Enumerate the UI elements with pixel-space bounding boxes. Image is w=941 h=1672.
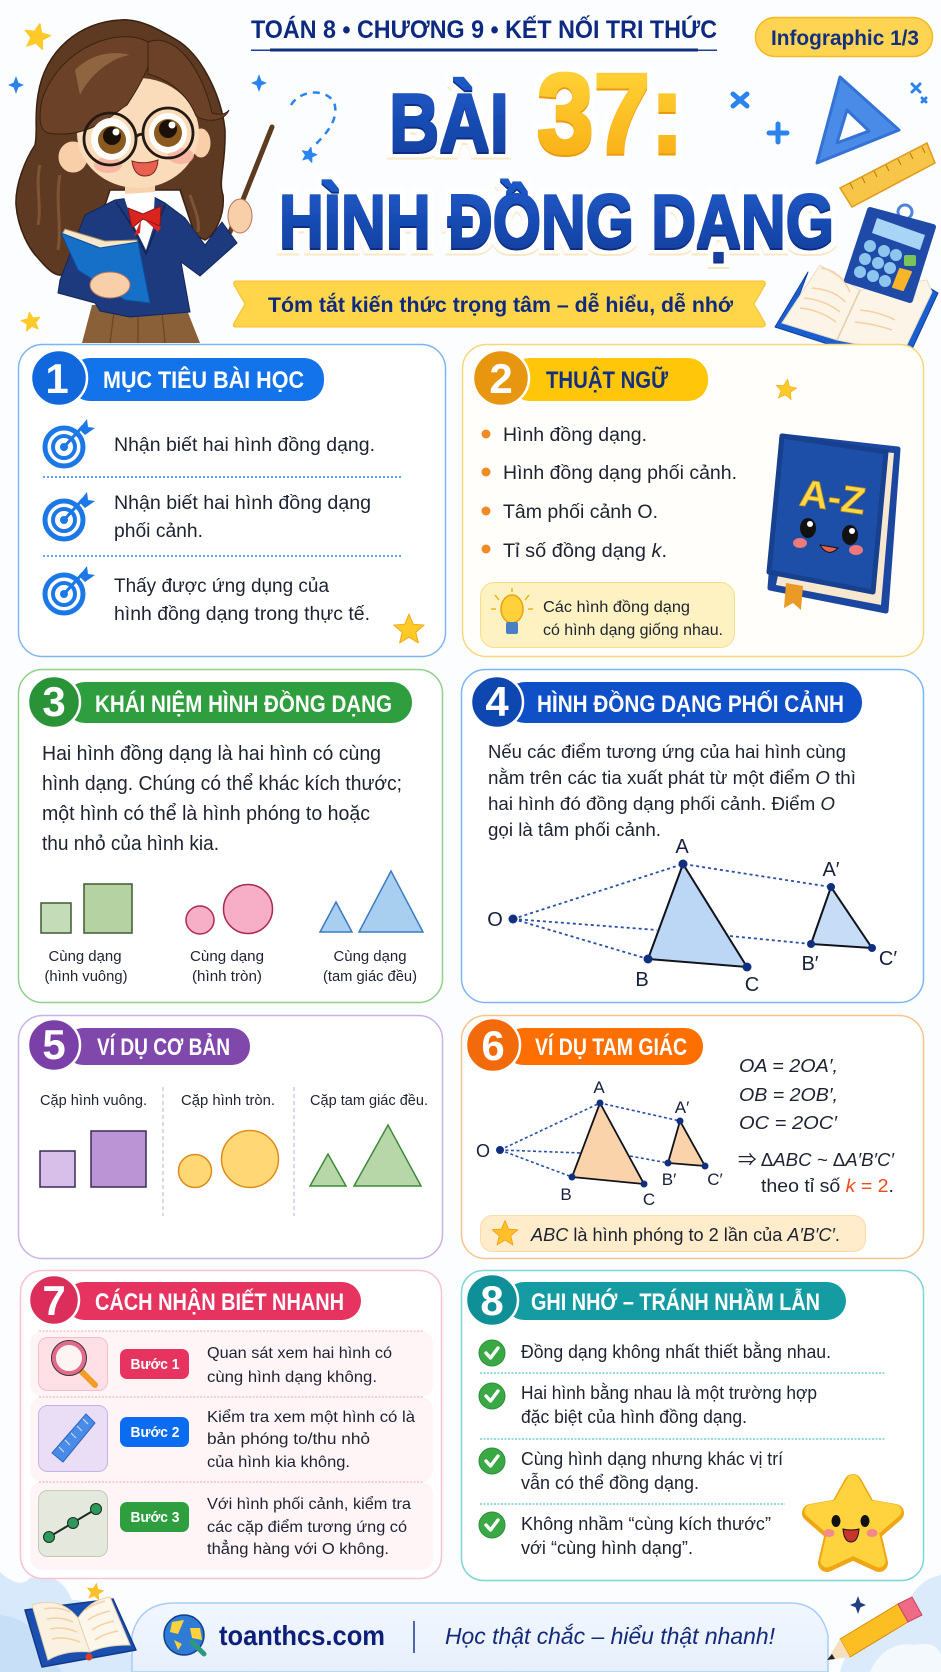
footer background clouds	[0, 1572, 941, 1672]
term list: Tâm phối cảnh O.	[503, 502, 658, 523]
example: triangles	[320, 871, 423, 985]
main title: 37:	[537, 50, 684, 176]
header pill 6	[466, 1018, 703, 1072]
step 3 row: Bước 3	[130, 1509, 180, 1526]
icon: footer open book	[25, 1582, 136, 1667]
step 1 row	[30, 1331, 433, 1397]
icon: calculator	[847, 205, 933, 300]
panel 7: quick recognition steps	[20, 1270, 442, 1578]
term list: Hình đồng dạng.	[503, 425, 647, 446]
header pill 4: HÌNH ĐỒNG DẠNG PHỐI CẢNH	[537, 689, 844, 718]
footer bar	[132, 1603, 828, 1672]
example: circle pair: Cặp hình tròn.	[181, 1092, 275, 1109]
definition text	[42, 743, 402, 855]
diagram: perspective triangles: C′	[879, 948, 897, 970]
definition text: Hai hình đồng dạng là hai hình có cùng	[42, 743, 381, 765]
step 3 row: thẳng hàng với O không.	[207, 1539, 389, 1558]
back hair	[16, 20, 225, 275]
definition text: thu nhỏ của hình kia.	[42, 833, 219, 855]
diagram: triangles: C	[643, 1190, 655, 1209]
term list: Hình đồng dạng phối cảnh.	[503, 463, 737, 484]
header pill 4: 4	[485, 678, 509, 725]
reminder 1: Đồng dạng không nhất thiết bằng nhau.	[521, 1341, 831, 1362]
icon: star	[394, 614, 424, 643]
math relations: OC = 2OC′	[739, 1113, 838, 1133]
diagram: triangles: A′	[675, 1098, 689, 1117]
illustration: star mascot	[811, 1481, 895, 1563]
diagram: triangles	[476, 1078, 723, 1209]
note box with lightbulb: Các hình đồng dạng	[543, 599, 690, 616]
header pill 8	[466, 1274, 846, 1326]
example: squares: Cùng dạng	[48, 949, 122, 965]
panel 8: reminders	[462, 1270, 924, 1580]
header pill 4	[471, 676, 862, 728]
diagram: triangles: B′	[662, 1170, 676, 1189]
header pill 8: GHI NHỚ – TRÁNH NHẦM LẪN	[531, 1287, 820, 1316]
step 2 row: Kiểm tra xem một hình có là	[207, 1408, 415, 1426]
step 2 row	[30, 1397, 433, 1482]
example: triangle pair: Cặp tam giác đều.	[310, 1092, 428, 1109]
header pill 5	[28, 1019, 250, 1071]
subtitle ribbon: Tóm tắt kiến thức trọng tâm – dễ hiểu, dễ nhớ	[268, 293, 733, 317]
bow tie	[128, 206, 161, 228]
main title	[279, 50, 834, 263]
text: goal 2: Nhận biết hai hình đồng dạng	[114, 493, 371, 514]
example: circles: Cùng dạng	[190, 949, 264, 965]
diagram: perspective triangles	[487, 836, 897, 996]
mouth	[132, 160, 158, 176]
icon: globe	[164, 1615, 204, 1655]
header pill 8: 8	[480, 1277, 504, 1324]
diagram: triangles: B	[560, 1185, 572, 1204]
text: goal 3: Thấy được ứng dụng của	[114, 576, 329, 597]
header pill 7	[29, 1275, 361, 1325]
panel 2: terminology	[462, 344, 924, 656]
glasses	[84, 108, 193, 165]
example: triangle pair	[310, 1092, 428, 1186]
reminder 4	[479, 1512, 771, 1558]
header pill 7: 7	[42, 1277, 66, 1324]
header pill 2: THUẬT NGỮ	[546, 366, 668, 394]
reminder 2	[479, 1382, 817, 1427]
callout with star	[480, 1216, 866, 1252]
diagram: perspective triangles: A′	[822, 859, 840, 881]
icon: footer pencil	[827, 1596, 922, 1660]
header pill 3: 3	[42, 678, 66, 725]
reminder 4: với “cùng hình dạng”.	[521, 1538, 693, 1558]
example: circle pair	[178, 1092, 278, 1188]
definition text: gọi là tâm phối cảnh.	[488, 819, 661, 840]
icon: target 1	[45, 419, 95, 466]
example: square pair: Cặp hình vuông.	[40, 1092, 147, 1109]
term list	[482, 425, 737, 562]
definition text: hình dạng. Chúng có thể khác kích thước;	[42, 773, 402, 795]
badge: infographic number: Infographic 1/3	[771, 27, 919, 50]
term list: Tỉ số đồng dạng k.	[503, 541, 667, 562]
step 3 row: các cặp điểm tương ứng có	[207, 1518, 407, 1536]
diagram: triangles: O	[476, 1141, 490, 1161]
step 2 row: Bước 2	[130, 1424, 180, 1441]
ears	[58, 141, 88, 173]
header pill 2: 2	[489, 355, 513, 402]
cheeks	[94, 157, 122, 173]
illustration: teacher girl with pointer and book	[16, 20, 272, 343]
step 1 row: Bước 1	[130, 1356, 180, 1373]
bangs	[40, 37, 150, 134]
top heading: course and chapter: TOÁN 8 • CHƯƠNG 9 • KẾT NỐI TRI THỨC	[251, 14, 717, 44]
icon: yellow ruler	[840, 143, 935, 207]
illustration: A-Z book mascot	[769, 436, 898, 611]
diagram: perspective triangles: C	[745, 974, 759, 996]
diagram: perspective triangles: A	[675, 836, 689, 858]
face	[77, 78, 199, 188]
example: square pair	[40, 1092, 147, 1187]
neck	[125, 180, 155, 202]
text: goal 2: phối cảnh.	[114, 521, 203, 542]
header pill 2	[473, 350, 708, 406]
header pill 5: 5	[42, 1021, 66, 1068]
definition text: nằm trên các tia xuất phát từ một điểm O thì	[488, 767, 856, 788]
math relations: OB = 2OB′,	[739, 1085, 838, 1105]
header pill 6: VÍ DỤ TAM GIÁC	[535, 1033, 687, 1061]
step 1 row: cùng hình dạng không.	[207, 1369, 377, 1386]
definition text: một hình có thể là hình phóng to hoặc	[42, 803, 370, 825]
header pill 1: 1	[45, 355, 69, 402]
example: circles	[186, 884, 272, 985]
decor: stars and sparkles left	[8, 21, 335, 332]
note box with lightbulb	[480, 582, 734, 648]
diagram: perspective triangles: B′	[801, 953, 819, 975]
note box with lightbulb: có hình dạng giống nhau.	[543, 622, 723, 639]
icon: open book	[775, 265, 938, 360]
website name: toanthcs.com	[219, 1620, 385, 1651]
step 2 row: bản phóng to/thu nhỏ	[207, 1431, 370, 1448]
definition text: hai hình đó đồng dạng phối cảnh. Điểm O	[488, 793, 835, 814]
math relations: OA = 2OA′,	[739, 1056, 838, 1076]
shirt	[123, 192, 155, 250]
icon: target 2	[45, 492, 95, 539]
hands	[90, 272, 130, 298]
example: circles: (hình tròn)	[192, 969, 262, 985]
panel 5: basic examples	[18, 1016, 442, 1258]
pointer	[230, 127, 272, 232]
header pill 7: CÁCH NHẬN BIẾT NHANH	[95, 1288, 344, 1316]
example: triangles: (tam giác đều)	[323, 969, 417, 985]
main title: BÀI	[389, 76, 509, 169]
math relations: ⇒ ΔABC ~ ΔA′B′C′	[738, 1150, 895, 1170]
icon: triangle set square	[817, 77, 899, 163]
diagram: perspective triangles: B	[635, 969, 649, 991]
icon: star	[774, 378, 798, 400]
reminder 2: đặc biệt của hình đồng dạng.	[521, 1407, 747, 1427]
decor: blue sparkles right	[733, 84, 926, 142]
jacket	[58, 195, 237, 317]
reminder 3	[479, 1448, 783, 1493]
skirt	[82, 305, 200, 343]
reminder 4: Không nhầm “cùng kích thước”	[521, 1514, 771, 1534]
reminder 3: Cùng hình dạng nhưng khác vị trí	[521, 1449, 783, 1469]
example: squares: (hình vuông)	[44, 969, 128, 985]
header pill 3	[28, 676, 412, 728]
book held	[62, 229, 139, 250]
panel 3: similar figures concept	[18, 670, 442, 1002]
example: triangles: Cùng dạng	[334, 949, 406, 965]
panel 6: triangle example	[462, 1016, 924, 1258]
subtitle ribbon	[233, 281, 765, 327]
reminder 1	[479, 1340, 831, 1366]
math relations	[738, 1056, 895, 1196]
slogan: Học thật chắc – hiểu thật nhanh!	[445, 1623, 776, 1649]
main title: HÌNH ĐỒNG DẠNG	[279, 179, 834, 263]
diagram: triangles: A	[593, 1078, 605, 1097]
diagram: perspective triangles: O	[487, 909, 503, 931]
header pill 1	[31, 350, 324, 406]
callout with star: ABC là hình phóng to 2 lần của A′B′C′.	[530, 1225, 840, 1245]
illustration: A-Z book mascot: A-Z	[797, 473, 868, 523]
example: squares	[41, 884, 132, 985]
math relations: theo tỉ số k = 2.	[761, 1176, 894, 1196]
header pill 6: 6	[481, 1022, 505, 1069]
step 3 row	[30, 1482, 433, 1570]
definition text: Nếu các điểm tương ứng của hai hình cùng	[488, 741, 846, 762]
step 3 row: Với hình phối cảnh, kiểm tra	[207, 1495, 411, 1513]
icon: target 3	[45, 566, 95, 613]
definition text	[488, 741, 856, 840]
panel 4: perspective similar figures	[462, 670, 924, 1002]
header pill 5: VÍ DỤ CƠ BẢN	[97, 1032, 230, 1061]
diagram: triangles: C′	[707, 1170, 723, 1189]
badge: infographic number	[756, 18, 932, 56]
eyes	[91, 118, 131, 160]
header pill 3: KHÁI NIỆM HÌNH ĐỒNG DẠNG	[95, 690, 392, 718]
header pill 1: MỤC TIÊU BÀI HỌC	[103, 366, 304, 394]
panel 1: learning goals	[18, 344, 446, 656]
reminder 3: vẫn có thể đồng dạng.	[521, 1472, 699, 1493]
step 1 row: Quan sát xem hai hình có	[207, 1345, 392, 1362]
text: goal 3: hình đồng dạng trong thực tế.	[114, 604, 370, 625]
reminder 2: Hai hình bằng nhau là một trường hợp	[521, 1382, 817, 1403]
step 2 row: của hình kia không.	[207, 1454, 350, 1471]
text: goal 1: Nhận biết hai hình đồng dạng.	[114, 435, 375, 456]
